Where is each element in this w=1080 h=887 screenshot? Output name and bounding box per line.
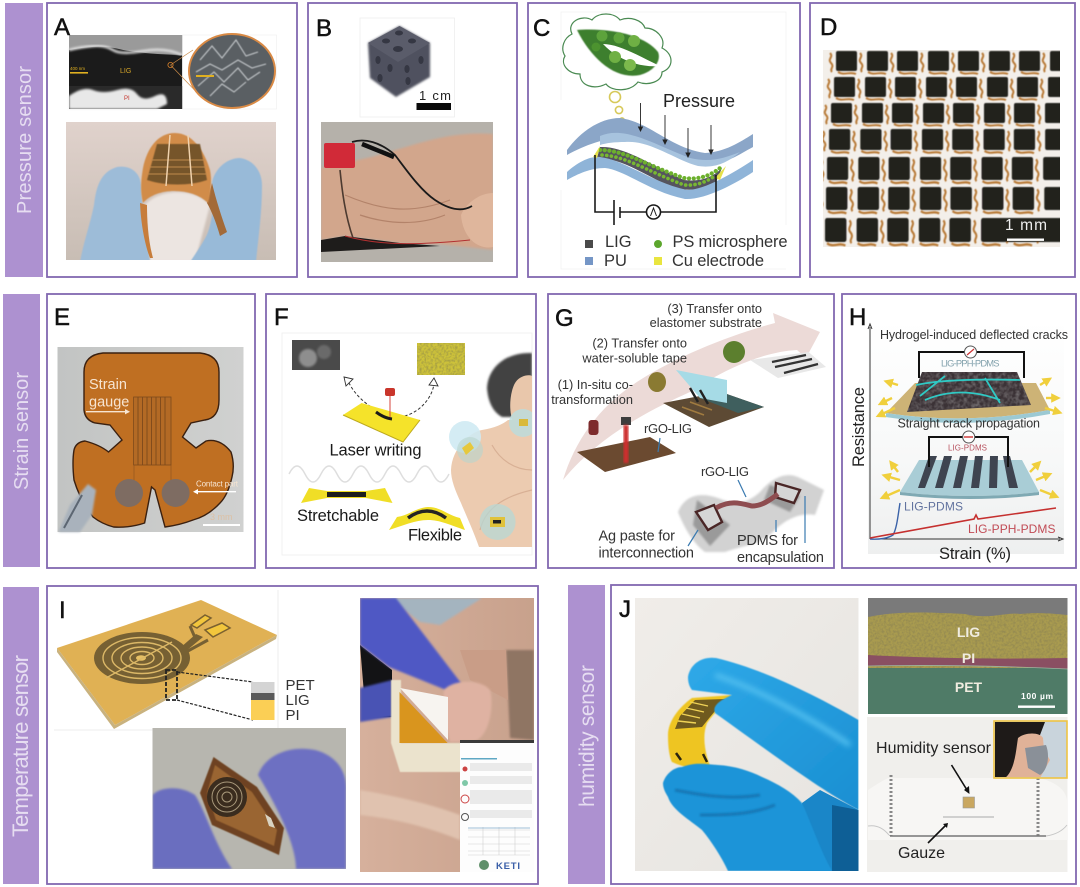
encapsulated device: [678, 475, 824, 552]
step 3 plate with electrodes: [723, 341, 826, 378]
x axis title: Strain (%): [939, 545, 1011, 563]
photo: gloved fingers holding sensor: [635, 598, 858, 871]
SEM layers image: LIG: [957, 624, 980, 640]
letter J: J: [619, 596, 631, 623]
letter F: F: [274, 304, 289, 331]
thought cloud with pea pod: [563, 14, 671, 122]
inset: person wearing mask: [994, 721, 1067, 778]
strain gauge label: [86, 377, 130, 414]
device callouts: [598, 464, 824, 566]
photo: sensor between purple gloves: [152, 728, 346, 869]
photo: gloved fingers bending sensor: [66, 122, 276, 262]
stretchable label: Stretchable: [297, 507, 379, 525]
legend: PU: [604, 252, 627, 270]
step labels: elastomer substrate: [650, 315, 762, 330]
device callouts: rGO-LIG: [701, 464, 749, 479]
photo: sensor on wrist: [321, 122, 493, 262]
layer labels: PET: [286, 677, 315, 694]
step labels: [551, 301, 762, 407]
heading: straight cracks: Straight crack propagation: [898, 416, 1040, 430]
chart backdrop: [868, 320, 1064, 554]
flexible label: Flexible: [408, 526, 462, 544]
SEM layers image: PET: [955, 679, 983, 695]
SEM cross-section image: 400 nm: [70, 66, 85, 71]
dashed arrows from laser spot: [348, 381, 434, 416]
layer labels: [286, 677, 315, 724]
pressure label: Pressure: [663, 91, 735, 111]
letter I: I: [59, 597, 66, 624]
layer stack: [251, 682, 274, 720]
LIG-PDMS device: LIG-PDMS: [948, 444, 987, 452]
LIG-PDMS curve: [870, 500, 963, 539]
side label: Strain sensor: [3, 294, 40, 567]
device callouts: Ag paste for: [598, 528, 675, 544]
side label: humidity sensor: humidity sensor: [576, 665, 599, 807]
letter C: C: [533, 15, 550, 42]
gauze label and arrow: Gauze: [898, 845, 945, 862]
1 mm scale: 1 mm: [1005, 217, 1047, 234]
magnified SEM inset: [168, 34, 276, 109]
SEM layers image: 100 µm: [1021, 691, 1053, 701]
strain gauge label: Strain: [89, 377, 127, 393]
axes: [868, 324, 1063, 541]
strain gauge label: gauge: [89, 394, 129, 410]
side label: Pressure sensor: Pressure sensor: [14, 66, 36, 214]
panel: I temperature sensor: [47, 586, 538, 884]
letter E: E: [54, 304, 70, 331]
step labels: transformation: [551, 392, 633, 407]
step labels: (1) In-situ co-: [558, 377, 633, 392]
gauze label and arrow: [898, 823, 948, 862]
illustrated man with sensors: [449, 353, 537, 547]
panel: A laser-induced graphene pressure sensor: [47, 3, 297, 277]
side label: Pressure sensor: [5, 3, 43, 277]
SEM layers image: [868, 598, 1068, 714]
SEM cross-section image: PI: [124, 96, 130, 102]
cube photo with 1 cm scale bar: 1 cm: [419, 88, 451, 103]
step labels: water-soluble tape: [581, 350, 687, 366]
side label: humidity sensor: [568, 585, 605, 884]
yellow plate with laser head: [343, 388, 420, 442]
LIG-PPH-PDMS device: LIG-PPH-PDMS: [941, 358, 1000, 368]
legend: [585, 233, 788, 270]
device callouts: encapsulation: [737, 550, 824, 566]
contact part label: [193, 480, 239, 494]
cube photo with 1 cm scale bar: [360, 18, 454, 117]
KETI logo text: KETI: [496, 861, 520, 872]
LIG-PPH-PDMS curve: LIG-PPH-PDMS: [968, 522, 1056, 536]
panel: H resistance vs strain: [842, 294, 1076, 568]
curved PU and LIG layers with microspheres: [567, 118, 753, 199]
phone screen UI: [460, 740, 534, 872]
rGO-LIG label with pointer: rGO-LIG: [644, 421, 692, 436]
step 2 plate with film: [648, 370, 764, 427]
LIG-PDMS curve: LIG-PDMS: [904, 500, 963, 514]
diagram frame: [561, 12, 786, 269]
wave divider: [289, 466, 449, 482]
panel: E strain gauge: [47, 294, 255, 568]
pink process arrow: [563, 313, 820, 480]
zoom dashed box: [166, 670, 253, 720]
SEM cross-section image: LIG: [120, 68, 131, 75]
schematic frame: [54, 590, 278, 730]
SEM inset grey: [292, 340, 340, 370]
photo: patch on skin with phone screen: [360, 598, 534, 872]
rGO-LIG label with pointer: [644, 421, 692, 452]
sensor schematic on yellow substrate: [57, 600, 277, 729]
LIG-PPH-PDMS device: [886, 346, 1050, 423]
photo: gauze mask with humidity sensor: [867, 717, 1068, 872]
humidity sensor label and arrow: [876, 740, 992, 794]
device pointer lines: [688, 480, 805, 546]
panel: D sensor array photo: [810, 3, 1075, 277]
letter B: B: [316, 15, 332, 42]
contact part label: Contact part: [196, 480, 239, 488]
legend: Cu electrode: [672, 252, 764, 270]
letter H: H: [849, 304, 866, 331]
3 mm scale: 3 mm: [210, 512, 232, 522]
letter A: A: [54, 14, 70, 41]
step labels: (2) Transfer onto: [592, 336, 687, 350]
LIG-PPH-PDMS curve: [870, 508, 1056, 538]
arrowheads: [344, 377, 438, 386]
step 1 plate with laser: [577, 417, 676, 472]
side label: Temperature sensor: Temperature sensor: [8, 655, 33, 837]
panel: J humidity sensor: [611, 585, 1076, 884]
heading: hydrogel cracks: Hydrogel-induced deflected cracks: [880, 328, 1068, 342]
step labels: (3) Transfer onto: [667, 301, 762, 316]
layer labels: LIG: [286, 692, 310, 709]
photo: black pixel array on serpentine traces: [819, 50, 1071, 247]
side label: Temperature sensor: [3, 587, 39, 884]
panel: B cube and wrist sensor: [308, 3, 517, 277]
laser writing label: Laser writing: [330, 442, 422, 460]
y axis title: Resistance: [850, 387, 868, 467]
SEM layers image: PI: [962, 650, 975, 666]
layer labels: PI: [286, 707, 300, 724]
legend: PS microsphere: [672, 233, 788, 251]
letter G: G: [555, 305, 574, 332]
device callouts: interconnection: [598, 546, 694, 562]
humidity sensor label and arrow: Humidity sensor: [876, 740, 992, 757]
panel: C pea-pod inspired sensor: [528, 3, 800, 277]
inner frame: [282, 333, 532, 555]
panel: F laser writing wearable sensor: [266, 294, 537, 568]
photo: orange polyimide strain gauge: [58, 347, 244, 532]
side label: Strain sensor: Strain sensor: [11, 372, 33, 490]
yellow microstructure inset: [417, 343, 465, 375]
stretchable sensor: [301, 488, 392, 503]
SEM cross-section image: [69, 35, 182, 109]
panel: G rGO-LIG transfer process: [548, 294, 834, 568]
letter D: D: [820, 14, 837, 41]
legend: LIG: [605, 233, 632, 251]
pressure arrows: [638, 103, 713, 157]
LIG-PDMS device: [900, 431, 1039, 499]
3 mm scale: [203, 512, 240, 526]
device callouts: PDMS for: [737, 533, 798, 549]
flexible sensor: [389, 507, 465, 530]
circuit with battery and ammeter: [595, 155, 716, 225]
yellow strain arrows: [880, 380, 1058, 497]
